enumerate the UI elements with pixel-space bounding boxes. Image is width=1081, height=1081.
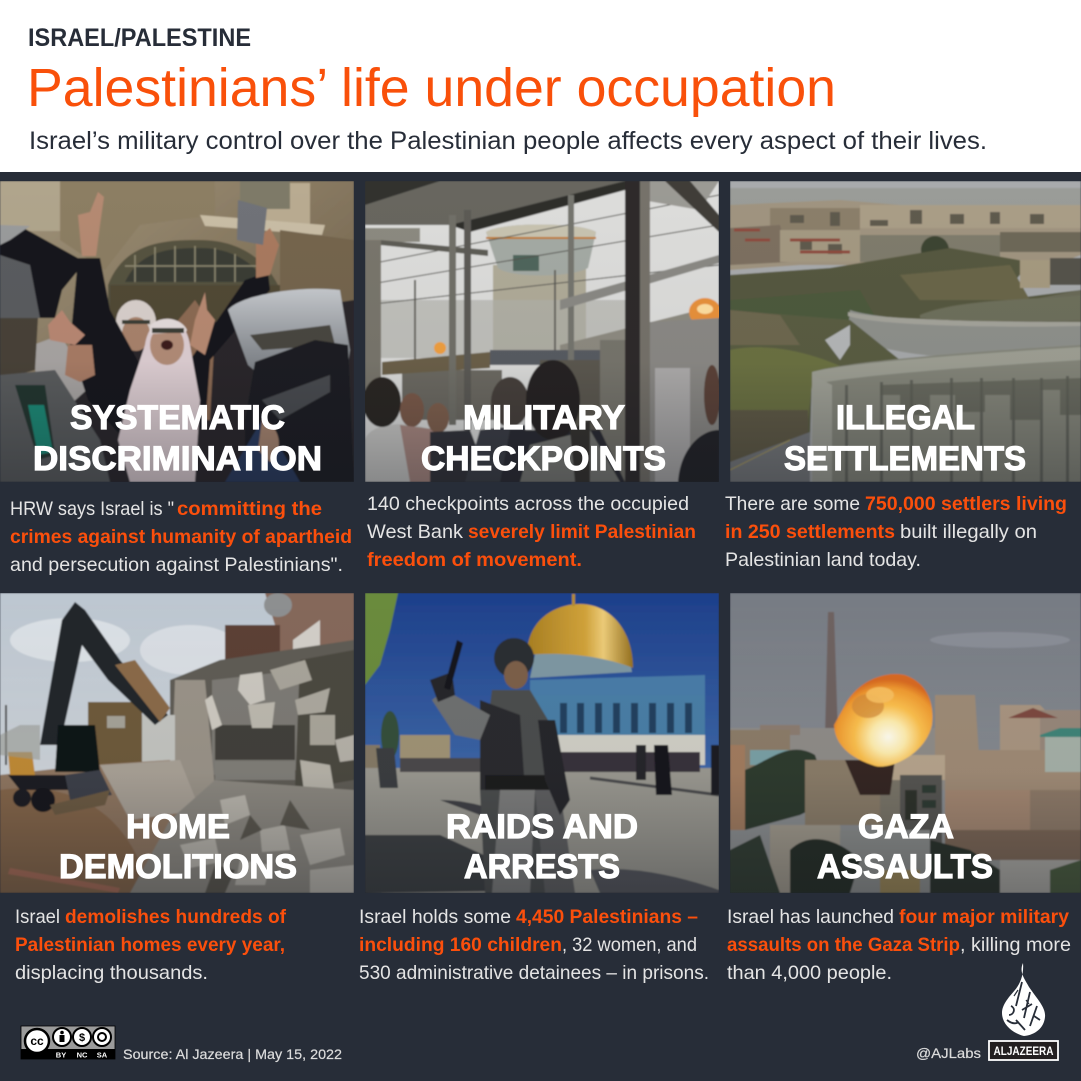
heading: GAZA ASSAULTS (817, 808, 993, 886)
roof (365, 181, 625, 225)
text block: settlements: in 250 settlements (725, 521, 895, 543)
text block: raids: Israel holds some (359, 906, 511, 928)
text block: checkpoints: 140 checkpoints across the occupied (367, 493, 689, 515)
heading: GAZA ASSAULTS: GAZA (858, 808, 954, 846)
visor (227, 288, 351, 370)
heading: SYSTEMATIC DISCRIMINATION (34, 404, 320, 471)
source line: Source: Al Jazeera | May 15, 2022 (123, 1046, 342, 1062)
text block: demolitions: demolishes hundreds of (65, 906, 286, 928)
building low (560, 312, 692, 351)
icon: creative commons badge: cc (30, 1034, 44, 1048)
raised hand near arch (190, 292, 215, 355)
text block: gaza (727, 906, 1071, 984)
heading: SYSTEMATIC DISCRIMINATION: SYSTEMATIC (70, 399, 285, 437)
tree (365, 593, 398, 685)
text block: gaza: , killing more (960, 934, 1071, 956)
text block: raids: including 160 children (359, 934, 562, 956)
town (730, 200, 1081, 270)
left soldier (0, 226, 85, 318)
title: Palestinians’ life under occupation (27, 58, 836, 118)
text block: discrimination (10, 498, 352, 576)
icon: creative commons badge (21, 1026, 115, 1060)
ground (0, 760, 190, 893)
subtitle: Israel’s military control over the Palestinian people affects every aspect of their lives. (29, 127, 987, 155)
text block: checkpoints: freedom of movement. (367, 549, 582, 571)
heading: RAIDS AND ARRESTS (446, 808, 638, 886)
sun glow (688, 297, 719, 320)
text block: demolitions: Palestinian homes every year, (15, 934, 285, 956)
heading: GAZA ASSAULTS: ASSAULTS (817, 848, 993, 886)
tower (825, 612, 838, 735)
panel: illegal settlements photo and heading (730, 181, 1081, 482)
text block: demolitions (15, 906, 286, 984)
white lace sleeve (34, 338, 86, 402)
text block: raids (359, 906, 709, 984)
pipe (8, 868, 120, 893)
smoke column (845, 760, 895, 795)
text block: discrimination: HRW says Israel is " (10, 498, 174, 520)
skyline far (730, 728, 950, 790)
text block: settlements: There are some (725, 493, 860, 515)
fist (48, 310, 85, 345)
handle: @AJLabs (916, 1045, 981, 1061)
poles (365, 240, 381, 410)
header band (0, 0, 1081, 172)
watchtower (493, 265, 586, 350)
icon: Al Jazeera calligraphy logo (1002, 963, 1045, 1036)
heading: RAIDS AND ARRESTS: RAIDS AND (446, 808, 638, 846)
near wall (812, 345, 1081, 482)
text block: settlements (725, 493, 1067, 571)
text block: settlements: built illegally on (900, 521, 1037, 543)
crowd (365, 424, 421, 482)
fireball (834, 674, 933, 767)
soldier (480, 690, 575, 893)
heading: SYSTEMATIC DISCRIMINATION: DISCRIMINATION (33, 440, 322, 478)
heading: ILLEGAL SETTLEMENTS (784, 404, 1026, 471)
heading: MILITARY CHECKPOINTS: CHECKPOINTS (421, 440, 666, 478)
panel: military checkpoints photo and heading (363, 181, 721, 482)
heading: RAIDS AND ARRESTS: ARRESTS (464, 848, 620, 886)
excavator cab (55, 725, 100, 772)
text block: gaza: than 4,000 people. (727, 962, 892, 984)
central buildings (805, 760, 880, 825)
lamp (434, 342, 446, 354)
text block: discrimination: committing the (177, 498, 322, 520)
text block: gaza: Israel has launched (727, 906, 894, 928)
icon: creative commons badge: SA (97, 1050, 108, 1060)
panel: raids and arrests photo and heading (365, 593, 719, 893)
right teal (1045, 735, 1081, 772)
heading: HOME DEMOLITIONS: DEMOLITIONS (59, 848, 297, 886)
text block: raids: 4,450 Palestinians – (516, 906, 698, 928)
heading: MILITARY CHECKPOINTS (422, 404, 666, 471)
far wall (848, 310, 1081, 356)
text block: raids: 530 administrative detainees – in prisons. (359, 962, 709, 984)
rubble pile (130, 780, 354, 893)
book (237, 200, 267, 245)
panel: gaza assaults photo and heading (730, 593, 1081, 893)
icon: creative commons badge: NC (77, 1050, 88, 1060)
right arm raised (192, 275, 270, 428)
text block: demolitions: displacing thousands. (15, 962, 208, 984)
older woman (114, 298, 157, 333)
text block: settlements: Palestinian land today. (725, 549, 921, 571)
hills (730, 248, 1081, 325)
crowd dark (70, 300, 354, 482)
left arm raised (70, 258, 140, 440)
kicker: ISRAEL/PALESTINE: ISRAEL/PALESTINE (28, 24, 251, 52)
chain link fence right (650, 318, 719, 482)
road (730, 432, 810, 482)
icon: Al Jazeera wordmark (989, 1041, 1058, 1060)
woman hijab (118, 319, 200, 482)
text block: demolitions: Israel (15, 906, 60, 928)
heading: ILLEGAL SETTLEMENTS: SETTLEMENTS (784, 440, 1026, 478)
excavator arm (40, 602, 168, 745)
big post (625, 181, 640, 482)
text block: gaza: four major military (899, 906, 1069, 928)
far arches (400, 735, 450, 765)
text block: checkpoints (367, 493, 696, 571)
gate, mid (402, 370, 502, 420)
text block: settlements: 750,000 settlers living (865, 493, 1067, 515)
panel: systematic discrimination photo and heading (0, 181, 354, 482)
heading: HOME DEMOLITIONS (59, 808, 297, 886)
mosque (530, 675, 705, 705)
icon: Al Jazeera wordmark: ALJAZEERA (994, 1046, 1054, 1058)
text block: raids: , 32 women, and (562, 934, 697, 956)
text block: gaza: assaults on the Gaza Strip (727, 934, 960, 956)
text block: checkpoints: West Bank (367, 521, 463, 543)
heading: HOME DEMOLITIONS: HOME (126, 808, 230, 846)
trees (745, 750, 830, 830)
foreground (770, 825, 850, 893)
concrete chunks (238, 672, 265, 705)
fence (380, 300, 625, 358)
block building (1020, 260, 1050, 288)
text block: checkpoints: severely limit Palestinian (468, 521, 696, 543)
heading: ILLEGAL SETTLEMENTS: ILLEGAL (836, 399, 975, 437)
left hill (730, 314, 899, 434)
heading: MILITARY CHECKPOINTS: MILITARY (463, 399, 625, 437)
panel: home demolitions photo and heading (0, 593, 354, 893)
left column (173, 679, 215, 798)
text block: discrimination: and persecution against Palestinians". (10, 554, 343, 576)
ruined upper building (264, 593, 354, 652)
crowd (560, 752, 700, 772)
icon: creative commons badge: BY (56, 1050, 66, 1060)
icon: creative commons badge: $ (79, 1032, 85, 1044)
text block: discrimination: crimes against humanity of apartheid (10, 526, 352, 548)
plaza (365, 768, 719, 893)
main ruin (169, 640, 354, 791)
back building (88, 702, 142, 765)
left buildings (730, 730, 790, 780)
